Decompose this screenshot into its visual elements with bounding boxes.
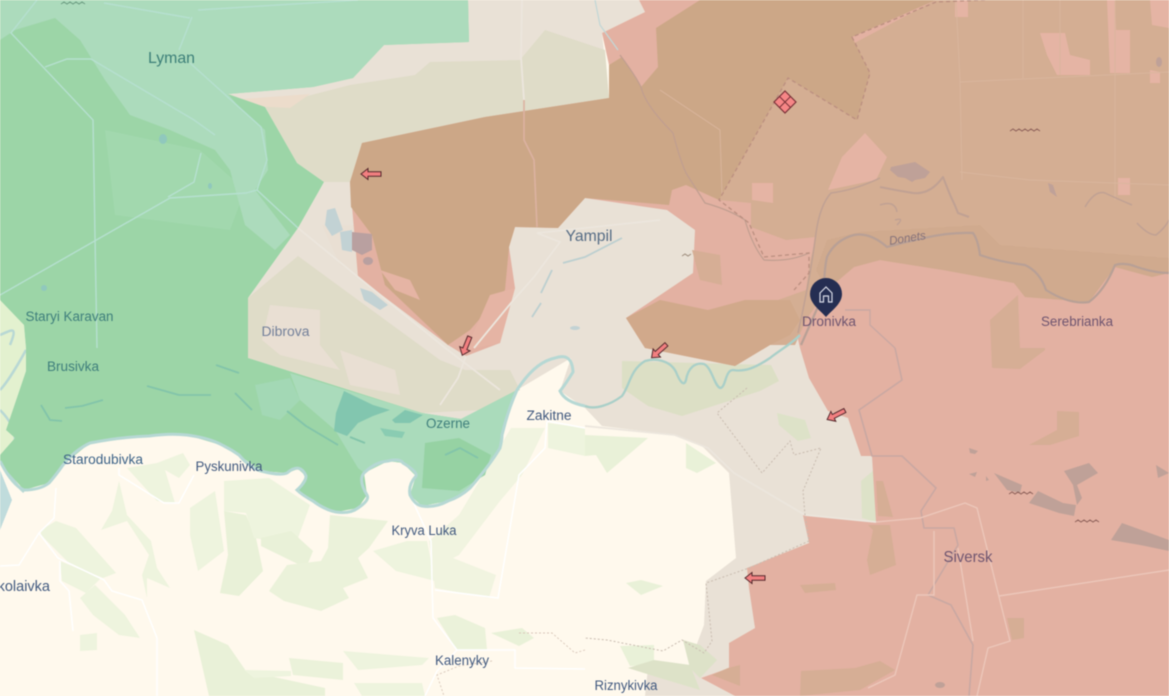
- roads and road line across contested zone: [298, 0, 876, 522]
- thin dotted lines on contested zone: [585, 388, 821, 653]
- label: Riznykivka: Riznykivka: [594, 678, 658, 693]
- left edge water and meadow: [0, 300, 26, 530]
- top river: [595, 0, 618, 50]
- streams in green area: [41, 365, 478, 458]
- label: Kryva Luka: Kryva Luka: [392, 523, 457, 538]
- label: Donets river: Donets: [888, 228, 927, 248]
- label: Zakitne: Zakitne: [526, 408, 572, 423]
- dashed border lines on red area: [719, 0, 985, 290]
- tan overlay, north-east: [719, 0, 1169, 345]
- meandering river east of Zakitne: [585, 335, 800, 407]
- forests on unoccupied land: [41, 423, 716, 696]
- arrow: by the river: [648, 340, 670, 362]
- label: Lyman: Lyman: [148, 50, 195, 67]
- fine lines on tan area: [660, 0, 1169, 200]
- green liberated area: [0, 0, 517, 512]
- icon: Dronivka location pin: [810, 278, 842, 317]
- label: Siversk: Siversk: [944, 549, 993, 566]
- label: Kalenyky: Kalenyky: [435, 653, 489, 668]
- Yampil streams: [532, 238, 622, 317]
- dotted line south: [437, 633, 585, 696]
- mid-tone green forest west of Lyman: [105, 130, 245, 230]
- arrow: south of brown area: [457, 335, 475, 357]
- roads on unoccupied land: [0, 421, 585, 696]
- grey lakes on red area: [890, 57, 1169, 688]
- north-south road on brown area: [524, 100, 537, 227]
- label: Serebrianka: Serebrianka: [1041, 314, 1113, 329]
- arrow: south of Dronivka: [825, 406, 847, 424]
- label: Starodubivka: Starodubivka: [63, 452, 143, 467]
- tan patches on red area: [692, 250, 1079, 696]
- red occupied area: [350, 0, 1169, 696]
- pink fields on tan area: [380, 0, 1169, 350]
- forests in contested zone: [228, 30, 876, 690]
- label: Yampil: Yampil: [566, 228, 612, 245]
- forest blob and wetlands: [255, 378, 491, 491]
- lake on brown edge: [352, 232, 373, 265]
- arrow: west of brown area: [361, 168, 381, 180]
- label: Staryi Karavan: Staryi Karavan: [26, 309, 114, 324]
- fortification marks: [61, 2, 1099, 522]
- label: Dibrova: Dibrova: [262, 324, 310, 339]
- label: Dronivka: Dronivka: [802, 314, 856, 329]
- roads in green area: [0, 0, 358, 348]
- label: Brusivka: Brusivka: [47, 359, 99, 374]
- small lakes in green area: [41, 134, 212, 291]
- lakes near Yampil: [325, 208, 580, 330]
- lighter green, Ozerne area: [290, 373, 517, 506]
- light patches near Dibrova: [262, 225, 400, 395]
- river system north of Donets: [620, 55, 1169, 333]
- river and roads near Siversk: [845, 310, 1169, 696]
- lighter green, Lyman area: [0, 0, 469, 250]
- border river: [0, 357, 585, 512]
- Donets river: [801, 233, 1169, 345]
- icon: red diamond marker: [774, 91, 796, 113]
- label: Pyskunivka: Pyskunivka: [196, 459, 263, 474]
- brown area south of Yampil: [626, 300, 800, 366]
- label: Ozerne: Ozerne: [426, 416, 470, 431]
- darker band along the Donets: [816, 225, 1169, 302]
- arrow: west of Siversk: [745, 572, 765, 584]
- contested grey zone: [228, 0, 900, 696]
- dark brown overlay: [350, 0, 936, 345]
